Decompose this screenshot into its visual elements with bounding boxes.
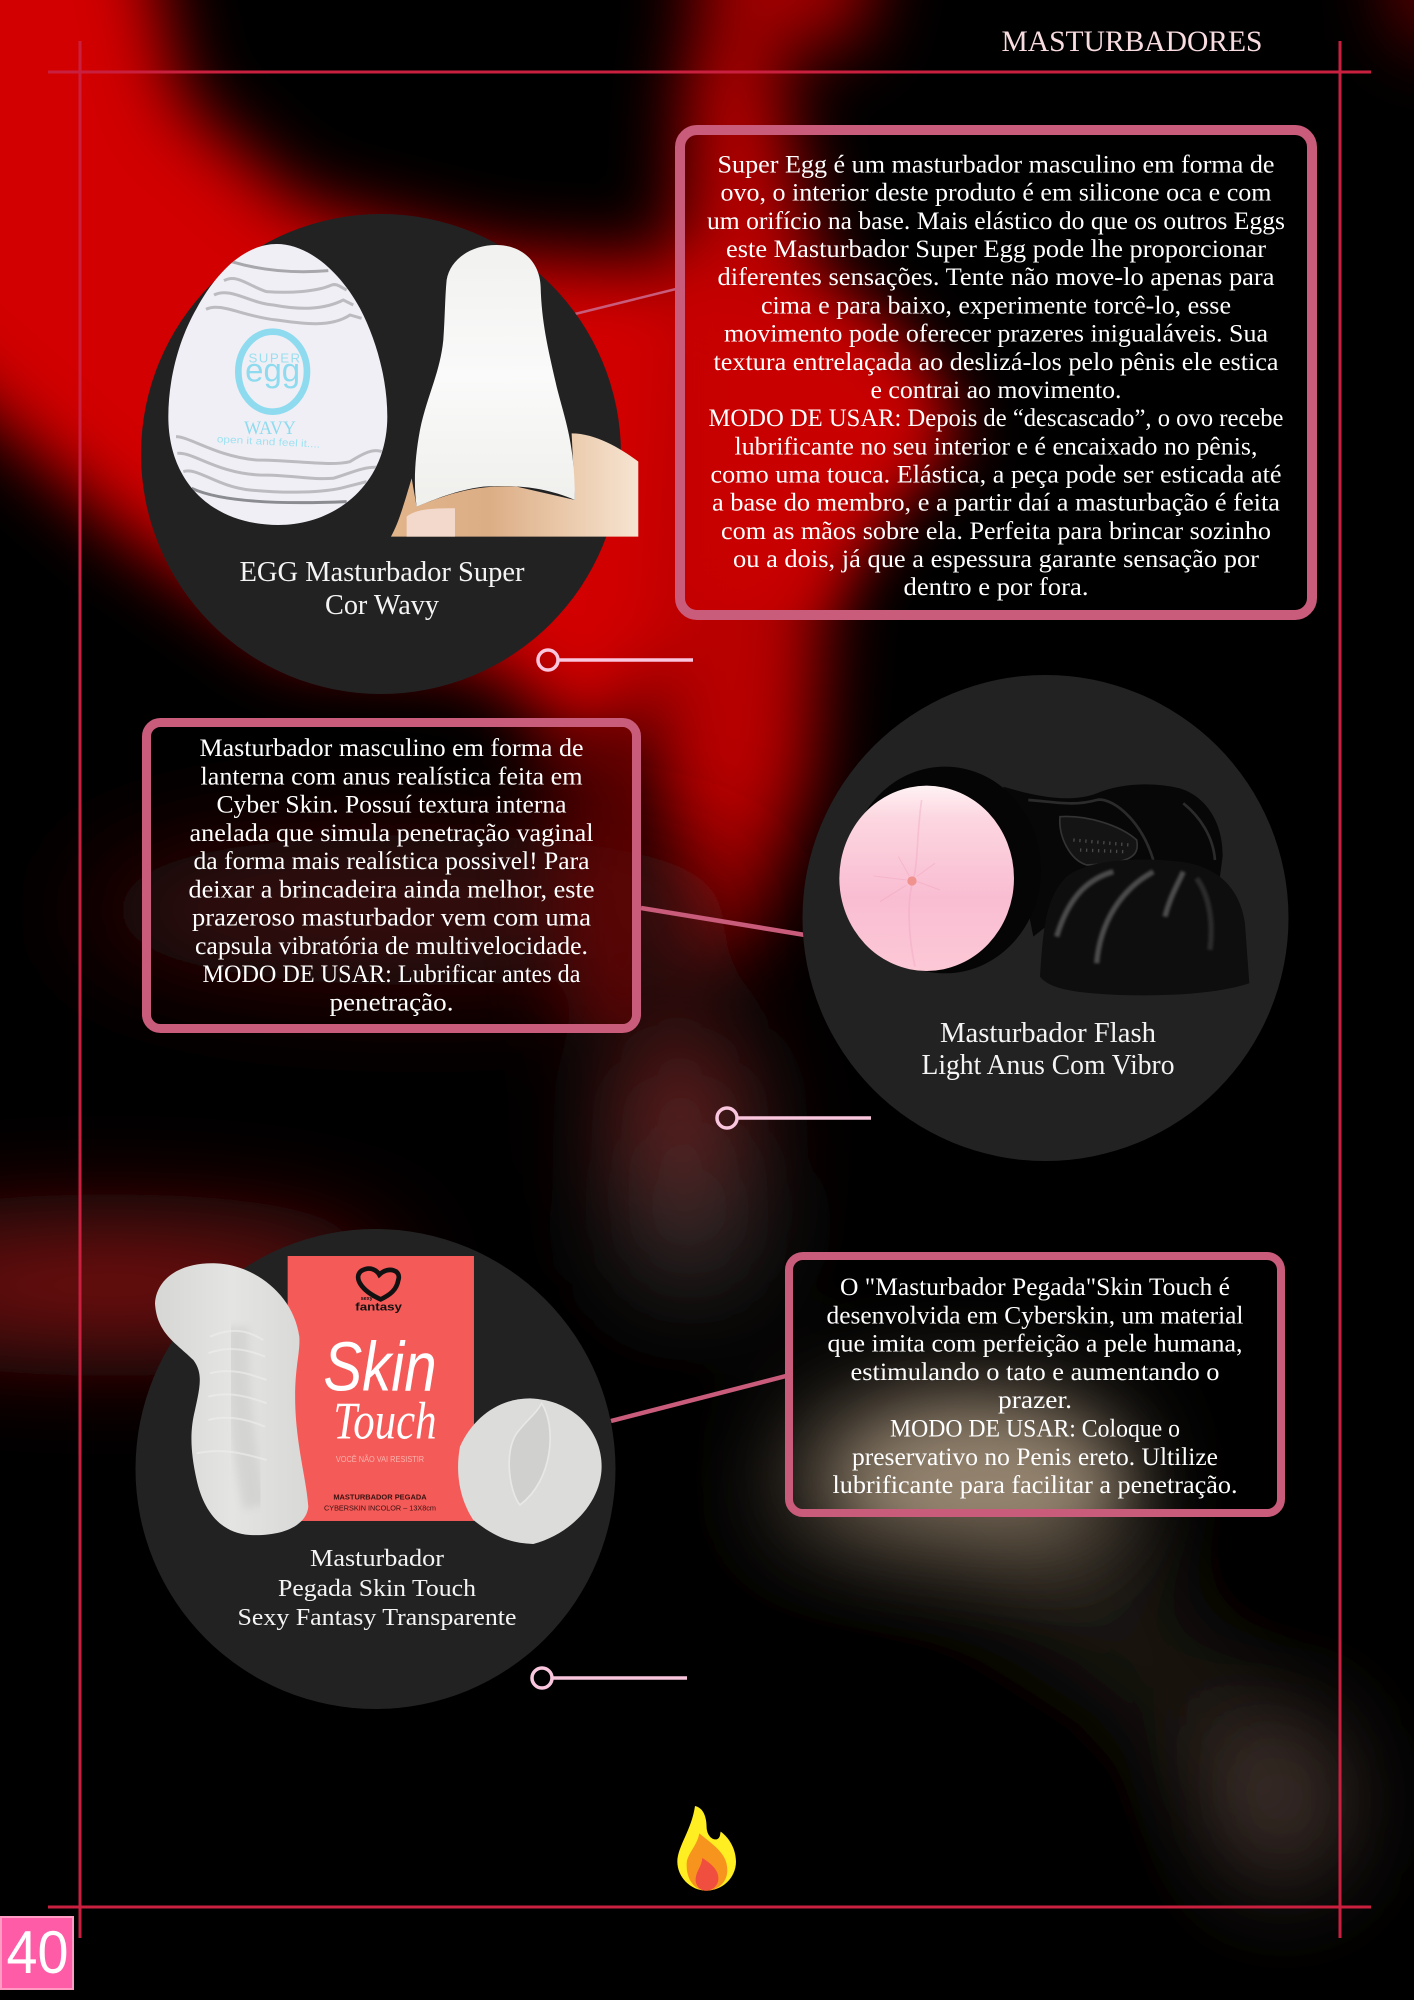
- page number: 40: [6, 1919, 68, 1986]
- text block: MODO DE USAR: Coloque o: [890, 1416, 1180, 1442]
- text block: que imita com perfeição a pele humana,: [828, 1331, 1242, 1358]
- text block: lanterna com anus realística feita em: [200, 763, 583, 790]
- arrow: connector skin touch to description: [611, 1376, 786, 1421]
- caption: Pegada Skin Touch: [278, 1576, 476, 1602]
- caption: EGG Masturbador Super: [240, 557, 525, 588]
- icon: red skin touch package: fantasy: [355, 1302, 402, 1314]
- icon: egg product photo: egg: [245, 353, 300, 390]
- icon: red skin touch package: Skin: [323, 1328, 437, 1406]
- text block: Cyber Skin. Possuí textura interna: [216, 792, 566, 819]
- text block: capsula vibratória de multivelocidade.: [195, 933, 588, 960]
- title: MASTURBADORES: [1002, 25, 1262, 58]
- text block: O "Masturbador Pegada"Skin Touch é: [840, 1274, 1230, 1301]
- icon: egg product photo: SUPER: [248, 351, 300, 366]
- circle backdrop: [802, 675, 1288, 1161]
- circle backdrop: [141, 214, 621, 694]
- arrow: connector flash light to description: [641, 908, 805, 935]
- text block: movimento pode oferecer prazeres inigualáveis. Sua: [724, 321, 1268, 348]
- icon: egg product photo: [168, 244, 387, 525]
- text block: MODO DE USAR: Depois de “descascado”, o ovo recebe: [708, 405, 1284, 432]
- caption: [240, 557, 525, 621]
- text block: preservativo no Penis ereto. Ultilize: [852, 1444, 1218, 1471]
- icon: transparent sleeve: [155, 1263, 308, 1535]
- text block: prazeroso masturbador vem com uma: [192, 905, 591, 932]
- text block: ou a dois, já que a espessura garante sensação por: [733, 546, 1260, 573]
- text block: um orifício na base. Mais elástico do que os outros Eggs: [707, 208, 1285, 235]
- text block: e contrai ao movimento.: [870, 377, 1122, 404]
- caption: Masturbador Flash: [940, 1018, 1156, 1049]
- panel: skin touch description: [789, 1256, 1281, 1555]
- panel: skin touch product: [136, 1229, 616, 1709]
- text block: como uma touca. Elástica, a peça pode ser esticada até: [710, 462, 1282, 488]
- panel: egg description: [660, 130, 1312, 640]
- arrow: connector egg to description: [575, 289, 676, 314]
- icon: red skin touch package: Touch: [333, 1390, 437, 1450]
- icon: white sleeve held in hand: [391, 245, 638, 537]
- icon: red skin touch package: sexy: [361, 1296, 373, 1302]
- text block: Super Egg é um masturbador masculino em forma de: [718, 152, 1274, 178]
- text block: ovo, o interior deste produto é em silicone oca e com: [720, 180, 1272, 207]
- panel: flash light description: [142, 718, 641, 1033]
- text block: lubrificante no seu interior e é encaixado no pênis,: [734, 433, 1258, 460]
- icon: egg product photo: open it and feel it....: [217, 434, 320, 451]
- caption: [922, 1018, 1174, 1081]
- panel: flash light product: [802, 675, 1288, 1161]
- text block: deixar a brincadeira ainda melhor, este: [188, 876, 594, 903]
- icon: red skin touch package: CYBERSKIN INCOLOR – 13X8cm: [324, 1503, 436, 1512]
- icon: flame: [677, 1806, 736, 1891]
- callout marker: egg: [538, 650, 693, 670]
- text block: cima e para baixo, experimente torcê-lo, esse: [761, 292, 1231, 319]
- icon: red skin touch package: VOCÊ NÃO VAI RESISTIR: [336, 1455, 424, 1464]
- caption: [238, 1546, 516, 1631]
- text block: lubrificante para facilitar a penetração.: [832, 1472, 1238, 1499]
- caption: Masturbador: [310, 1546, 444, 1572]
- text block: este Masturbador Super Egg pode lhe proporcionar: [726, 236, 1267, 263]
- callout marker: flash light: [717, 1108, 871, 1128]
- text block: penetração.: [330, 990, 454, 1016]
- panel: egg product: [141, 214, 638, 694]
- text block: com as mãos sobre ela. Perfeita para brincar sozinho: [721, 518, 1271, 545]
- text block: [707, 152, 1285, 601]
- text block: anelada que simula penetração vaginal: [190, 820, 594, 847]
- text block: da forma mais realística possivel! Para: [194, 848, 590, 875]
- text block: dentro e por fora.: [904, 574, 1088, 601]
- caption: Light Anus Com Vibro: [922, 1050, 1174, 1081]
- text block: diferentes sensações. Tente não move-lo apenas para: [718, 264, 1274, 291]
- text block: prazer.: [998, 1387, 1072, 1414]
- text block: a base do membro, e a partir daí a masturbação é feita: [712, 490, 1280, 517]
- caption: Sexy Fantasy Transparente: [238, 1605, 516, 1631]
- circle backdrop: [136, 1229, 616, 1709]
- callout marker: skin touch: [532, 1668, 687, 1688]
- text block: [188, 735, 594, 1016]
- text block: [826, 1274, 1244, 1499]
- icon: transparent sleeve opening: [458, 1398, 602, 1544]
- text block: desenvolvida em Cyberskin, um material: [826, 1302, 1244, 1329]
- text block: textura entrelaçada ao deslizá-los pelo pênis ele estica: [714, 349, 1278, 376]
- icon: egg product photo: WAVY: [244, 418, 296, 439]
- text block: Masturbador masculino em forma de: [200, 735, 584, 762]
- icon: red skin touch package: MASTURBADOR PEGADA: [333, 1492, 427, 1501]
- icon: red skin touch package: [288, 1256, 474, 1521]
- text block: estimulando o tato e aumentando o: [850, 1359, 1220, 1386]
- caption: Cor Wavy: [325, 590, 439, 621]
- icon: black masturbator with pink opening and cap: [839, 767, 1249, 995]
- text block: MODO DE USAR: Lubrificar antes da: [202, 961, 580, 988]
